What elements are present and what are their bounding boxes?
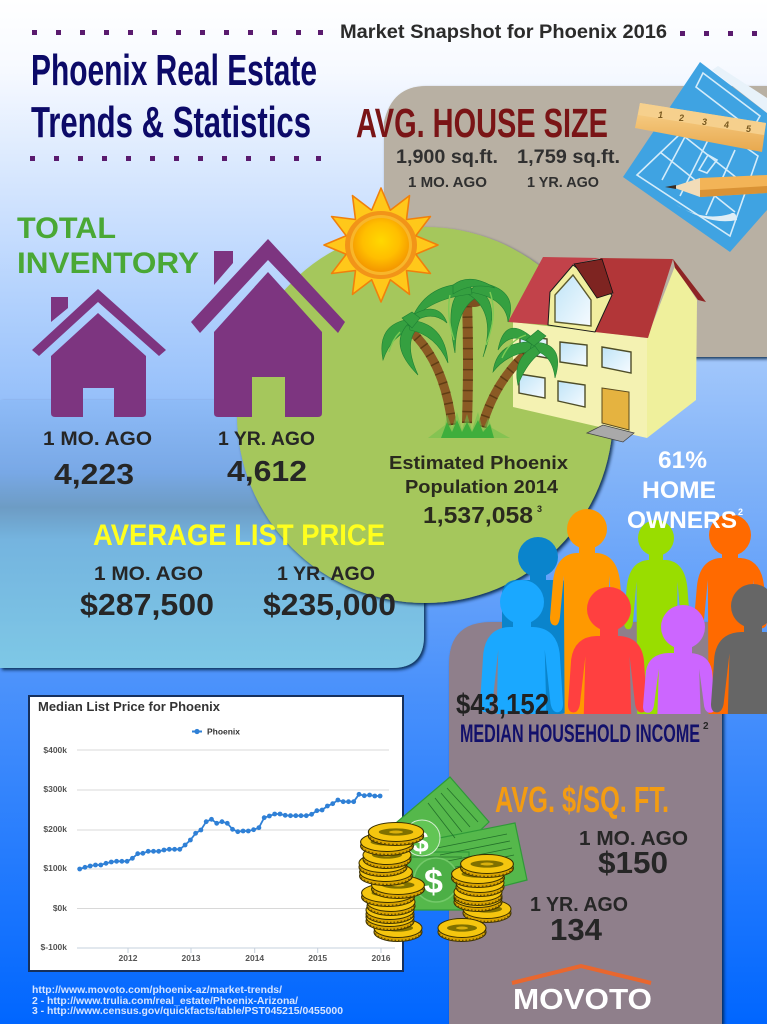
house size figures: 1,900 sq.ft. (396, 147, 498, 168)
icon: sun (324, 188, 438, 302)
population text: 1,537,058 (423, 502, 533, 528)
population circle (237, 227, 613, 603)
sources: http://www.movoto.com/phoenix-az/market-trends/ (32, 985, 282, 996)
home owners callout: HOME (642, 477, 716, 504)
list price figures: 1 YR. AGO (277, 564, 375, 585)
icon: house (508, 257, 706, 442)
chart: median list price (29, 696, 403, 971)
inventory figures: 4,223 (54, 459, 134, 491)
population text: Estimated Phoenix (389, 453, 568, 473)
home owners callout: 61% (658, 447, 707, 474)
people group (480, 509, 767, 714)
list price figures (80, 564, 396, 622)
market snapshot heading: Market Snapshot for Phoenix 2016 (340, 22, 667, 43)
median household income: $43,152 (456, 689, 549, 721)
icon: small house (32, 289, 166, 417)
list price figures: $235,000 (263, 587, 396, 622)
chart: median list price: $400k (43, 745, 67, 755)
title: Phoenix Real Estate (31, 46, 317, 95)
title (31, 46, 317, 147)
icon: blueprint, ruler and pencil: 1 (658, 110, 663, 120)
home owners callout: 2 (738, 507, 743, 517)
sources: 2 - http://www.trulia.com/real_estate/Phoenix-Arizona/ (32, 996, 298, 1007)
avg price per square foot: $150 (598, 845, 668, 880)
house size figures: 1,759 sq.ft. (517, 147, 620, 168)
house size figures: 1 MO. AGO (408, 174, 487, 191)
panel: list price (0, 400, 424, 668)
population text: 3 (537, 504, 542, 514)
chart: median list price: $0k (53, 903, 67, 913)
home owners callout (627, 447, 743, 534)
avg price per square foot: 1 MO. AGO (579, 828, 688, 850)
total inventory heading (17, 212, 199, 280)
median household income: 2 (703, 721, 709, 732)
average list price heading: AVERAGE LIST PRICE (93, 519, 385, 552)
avg price per square foot: 134 (550, 912, 603, 947)
icon: blueprint, ruler and pencil: 5 (746, 124, 752, 134)
icon: money and coins: $ (424, 863, 443, 901)
inventory figures: 1 YR. AGO (218, 429, 315, 450)
title: Trends & Statistics (31, 98, 311, 147)
chart: median list price: $200k (43, 824, 67, 834)
header dots (30, 30, 757, 161)
avg price per square foot: AVG. $/SQ. FT. (495, 779, 669, 820)
median household income (456, 689, 709, 748)
inventory figures: 4,612 (227, 456, 307, 488)
chart: median list price: 2015 (308, 953, 327, 963)
chart: median list price: Median List Price for Phoenix (38, 700, 220, 714)
logo: movoto (512, 966, 652, 1016)
icon: money and coins (359, 777, 527, 942)
chart: median list price: $100k (43, 863, 67, 873)
list price figures: 1 MO. AGO (94, 564, 203, 585)
chart: median list price: 2013 (182, 953, 201, 963)
sources (32, 985, 343, 1017)
house size figures: 1 YR. AGO (527, 174, 599, 191)
icon: large house (191, 239, 345, 417)
icon: palm trees (382, 279, 558, 438)
chart: median list price: 2012 (119, 953, 138, 963)
chart: median list price: 2016 (372, 953, 391, 963)
chart: median list price: $300k (43, 784, 67, 794)
population text (389, 453, 568, 528)
inventory figures: 1 MO. AGO (43, 429, 152, 450)
sources: 3 - http://www.census.gov/quickfacts/table/PST045215/0455000 (32, 1006, 343, 1017)
panel: income and price per square foot (449, 622, 722, 1024)
avg house size heading: AVG. HOUSE SIZE (356, 100, 608, 146)
panel: house size (384, 86, 767, 357)
icon: blueprint, ruler and pencil: 4 (723, 120, 729, 130)
house size figures (396, 147, 620, 191)
avg price per square foot: 1 YR. AGO (530, 894, 628, 916)
inventory figures (43, 429, 315, 491)
chart: median list price: Phoenix (207, 726, 240, 736)
total inventory heading: INVENTORY (17, 247, 199, 280)
icon: blueprint, ruler and pencil: 2 (678, 113, 684, 123)
population text: Population 2014 (405, 477, 558, 497)
home owners callout: OWNERS (627, 507, 737, 534)
logo: movoto: MOVOTO (513, 984, 652, 1016)
icon: money and coins: $ (412, 826, 429, 859)
chart: median list price: $-100k (41, 942, 67, 952)
chart: median list price: 2014 (245, 953, 264, 963)
avg price per square foot (495, 779, 688, 947)
list price figures: $287,500 (80, 587, 214, 622)
total inventory heading: TOTAL (17, 212, 116, 245)
icon: blueprint, ruler and pencil (623, 62, 767, 252)
icon: blueprint, ruler and pencil: 3 (702, 117, 707, 127)
